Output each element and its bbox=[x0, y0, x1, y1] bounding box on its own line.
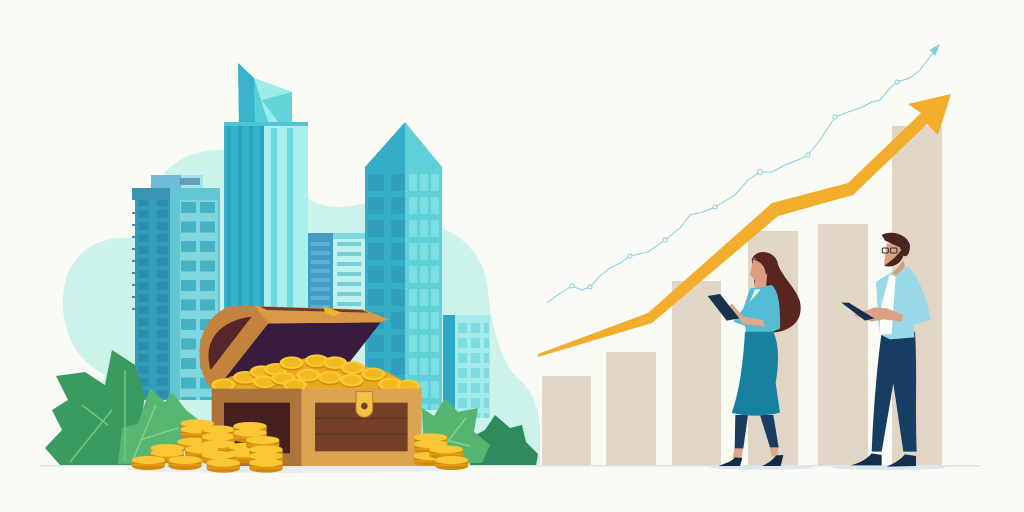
people bbox=[708, 233, 946, 470]
chest right face bbox=[302, 389, 422, 466]
bar chart bbox=[542, 126, 942, 465]
man bbox=[841, 233, 931, 467]
right foliage bbox=[422, 398, 538, 466]
coin stacks left bbox=[132, 419, 283, 473]
thin trend line bbox=[547, 45, 939, 303]
coin stacks right bbox=[413, 433, 468, 470]
floor shadows bbox=[710, 465, 946, 470]
building: far-left tower bbox=[132, 175, 220, 400]
building: right low tower bbox=[443, 315, 490, 418]
chest lid side bbox=[199, 306, 268, 387]
treasure chest bbox=[199, 306, 422, 466]
ground shadow under chest bbox=[125, 465, 455, 473]
chest lid top strip bbox=[255, 306, 388, 323]
ground line bbox=[40, 465, 980, 466]
chest left face bbox=[212, 389, 302, 466]
background blob bbox=[63, 150, 540, 466]
chest lock bbox=[356, 392, 373, 417]
coin pile bbox=[211, 354, 420, 394]
chest lid inner side bbox=[208, 317, 252, 370]
building: mid low-rise bbox=[308, 233, 365, 313]
lid clasp bbox=[323, 306, 342, 316]
building: tall central tower with spire bbox=[224, 63, 308, 322]
chest interior bbox=[225, 322, 381, 378]
gold growth arrow bbox=[538, 94, 951, 357]
building: pointed tower bbox=[365, 122, 442, 410]
left foliage bbox=[45, 350, 200, 465]
woman bbox=[708, 252, 801, 466]
